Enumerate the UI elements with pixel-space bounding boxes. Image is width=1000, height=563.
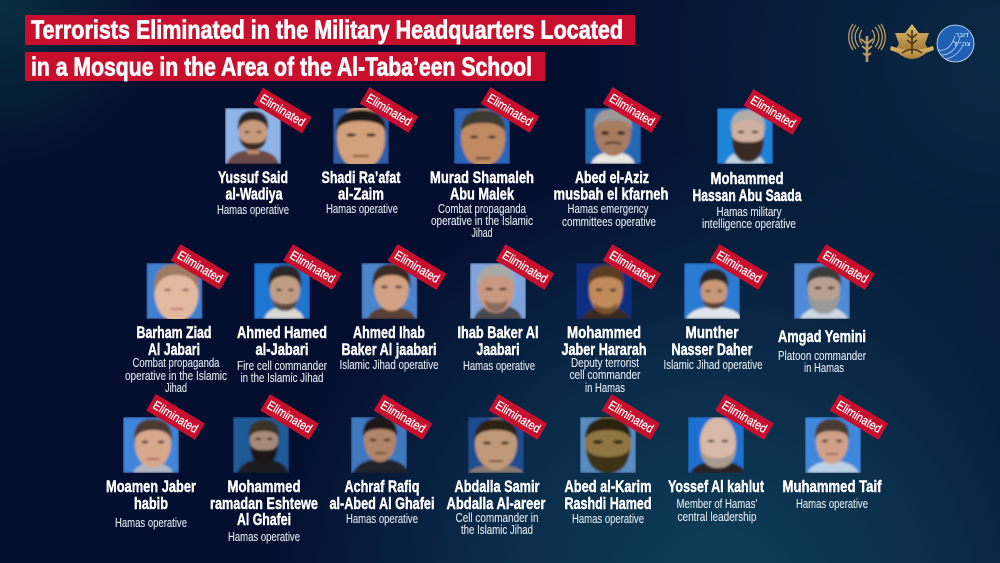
eliminated ribbon: Eliminated [264,398,315,436]
name and role: Hamas operative [572,512,644,526]
icon: blue round emblem: דובר [955,31,969,39]
name and role: Ihab Baker Al [458,324,538,342]
name and role: Hamas operative [346,512,418,526]
eliminated ribbon: Eliminated [485,91,535,129]
name and role: in Hamas [585,381,625,395]
name and role: Abu Malek [450,186,515,204]
card: Muhammed Taif [782,394,888,511]
name and role [106,478,196,530]
icon: star emblem [890,24,934,59]
card: Abed al-Karim Rashdi Hamed [564,394,660,526]
name and role: Abdalla Samir [454,478,540,496]
name and role: Nasser Daher [672,341,753,359]
photo [233,417,289,473]
name and role: Jihad [472,226,493,240]
eliminated ribbon: Eliminated [500,248,550,286]
name and role: Jaber Hararah [562,341,646,359]
eliminated ribbon: Eliminated [257,92,308,129]
card: Barham Ziad Al Jabari [125,244,229,395]
title: in a Mosque in the Area of the Al-Taba’een School [31,52,532,82]
name and role: Hassan Abu Saada [692,187,802,205]
card: Abdalla Samir Abdalla Al-areer [446,394,547,537]
photo [468,417,524,473]
card: Achraf Rafiq al-Abed Al Ghafei [330,394,434,526]
name and role: Fire cell commander [237,359,327,373]
name and role [782,478,882,511]
name and role: Rashdi Hamed [564,495,652,513]
photo [333,108,389,164]
name and role [322,169,401,216]
name and role: Islamic Jihad operative [664,358,763,372]
name and role: Mohammed [228,478,300,496]
eliminated ribbon: Eliminated [364,91,414,129]
name and role [564,478,652,526]
name and role: Combat propaganda [132,356,220,370]
name and role: Hamas operative [228,530,300,544]
photo [585,108,641,164]
name and role [210,478,318,544]
eliminated ribbon: Eliminated [378,398,428,436]
photo [805,417,861,473]
name and role: Hamas operative [326,202,398,216]
name and role: Hamas military [716,205,782,219]
eliminated ribbon: Eliminated [719,398,770,436]
name and role: Islamic Jihad operative [340,358,439,372]
card: Moamen Jaber habib [106,394,205,530]
name and role: al-Jabari [256,341,308,359]
photo [454,108,510,164]
name and role: central leadership [678,510,757,524]
name and role [446,478,546,537]
name and role: Member of Hamas’ [676,497,758,511]
name and role: Deputy terrorist [571,356,639,370]
eliminated ribbon: Eliminated [287,248,338,286]
name and role [237,324,327,385]
photo [362,263,418,319]
name and role: Shadi Ra’afat [322,169,401,187]
name and role: Yossef Al kahlut [668,478,764,496]
name and role: al-Abed Al Ghafei [330,495,434,513]
photo [146,263,202,319]
name and role: Ahmed Ihab [353,324,425,342]
photo [576,263,632,319]
name and role [340,324,439,372]
name and role: Ahmed Hamed [237,324,327,342]
eliminated ribbon: Eliminated [834,398,884,436]
title [25,14,635,82]
name and role: Muhammed Taif [782,478,882,496]
name and role: Al Jabari [148,341,200,359]
name and role [778,328,866,375]
name and role [562,324,646,395]
eliminated ribbon: Eliminated [714,248,764,286]
photo [254,263,310,319]
name and role: Mohammed [710,170,784,188]
eliminated ribbon: Eliminated [748,93,798,131]
card: Abed el-Aziz musbah el kfarneh [554,87,668,229]
name and role: al-Zaim [338,186,384,204]
name and role: ramadan Eshtewe [210,495,318,513]
photo [470,263,526,319]
name and role: musbah el kfarneh [554,186,668,204]
card: Yossef Al kahlut [668,394,774,524]
name and role: Hamas emergency [568,202,649,216]
name and role: Hamas operative [796,497,868,511]
name and role: operative in the Islamic [431,214,533,228]
name and role [554,169,668,229]
name and role [330,478,434,526]
photo [580,417,636,473]
name and role: Abdalla Al-areer [446,495,546,513]
name and role: cell commander [570,368,640,382]
card: Mohammed Hassan Abu Saada [692,89,802,231]
name and role: Abed al-Karim [564,478,652,496]
name and role: Barham Ziad [136,324,212,342]
name and role: Cell commander in [456,511,539,525]
photo [225,108,281,164]
name and role [458,324,538,373]
eliminated ribbon: Eliminated [493,398,543,436]
photo [794,263,850,319]
name and role: Abed el-Aziz [575,169,649,187]
name and role: committees operative [562,215,656,229]
name and role: Murad Shamaleh [430,169,534,187]
card: Murad Shamaleh Abu Malek [430,87,539,240]
eliminated ribbon: Eliminated [820,248,871,286]
card: Amgad Yemini [778,244,875,375]
name and role: Combat propaganda [438,202,526,216]
name and role: Munther [686,324,739,342]
name and role: Moamen Jaber [106,478,196,496]
photo [351,417,407,473]
card: Ahmed Hamed al-Jabari [237,244,342,385]
name and role: Hamas operative [463,359,535,373]
name and role [692,170,802,231]
photo [717,108,773,164]
name and role: Achraf Rafiq [344,478,420,496]
name and role: Amgad Yemini [778,328,866,346]
title: Terrorists Eliminated in the Military Headquarters Located [31,14,623,44]
name and role: Mohammed [567,324,641,342]
photo [684,263,740,319]
name and role [125,324,227,395]
name and role: al-Wadiya [226,186,283,204]
card: Shadi Ra'afat al-Zaim [322,87,418,216]
photo [688,417,744,473]
logos [849,24,974,62]
name and role: intelligence operative [702,217,796,231]
eliminated ribbon: Eliminated [607,91,657,129]
name and role: in the Islamic Jihad [240,371,324,385]
name and role: operative in the Islamic [125,369,227,383]
icon: blue round emblem [937,25,974,62]
name and role: Baker Al jaabari [342,341,436,359]
name and role [217,169,289,217]
eliminated ribbon: Eliminated [607,248,657,286]
name and role: in Hamas [804,361,844,375]
card: Munther Nasser Daher [664,244,768,372]
eliminated ribbon: Eliminated [606,398,656,436]
card: Yussuf Said al-Wadiya [217,88,312,217]
eliminated ribbon: Eliminated [175,248,225,286]
eliminated ribbon: Eliminated [150,398,201,436]
name and role: Platoon commander [778,349,866,363]
card: Mohammed ramadan Eshtewe Al Ghafei [210,394,319,544]
name and role: the Islamic Jihad [461,523,533,537]
name and role [664,324,763,372]
name and role [430,169,534,240]
name and role: Hamas operative [217,203,289,217]
card: Ahmed Ihab Baker Al jaabari [340,244,446,372]
eliminated ribbon: Eliminated [392,248,442,286]
name and role: Yussuf Said [218,169,288,187]
name and role: Al Ghafei [237,511,291,529]
icon: antenna emblem [849,24,885,62]
card: Mohammed Jaber Hararah [562,244,661,395]
photo [123,417,179,473]
name and role: habib [134,495,168,513]
card: Ihab Baker Al Jaabari [458,244,554,373]
name and role: Hamas operative [115,516,187,530]
name and role [668,478,764,524]
name and role: Jaabari [476,341,520,359]
icon: blue round emblem: צה״ל [953,40,971,48]
name and role: Jihad [165,381,187,395]
